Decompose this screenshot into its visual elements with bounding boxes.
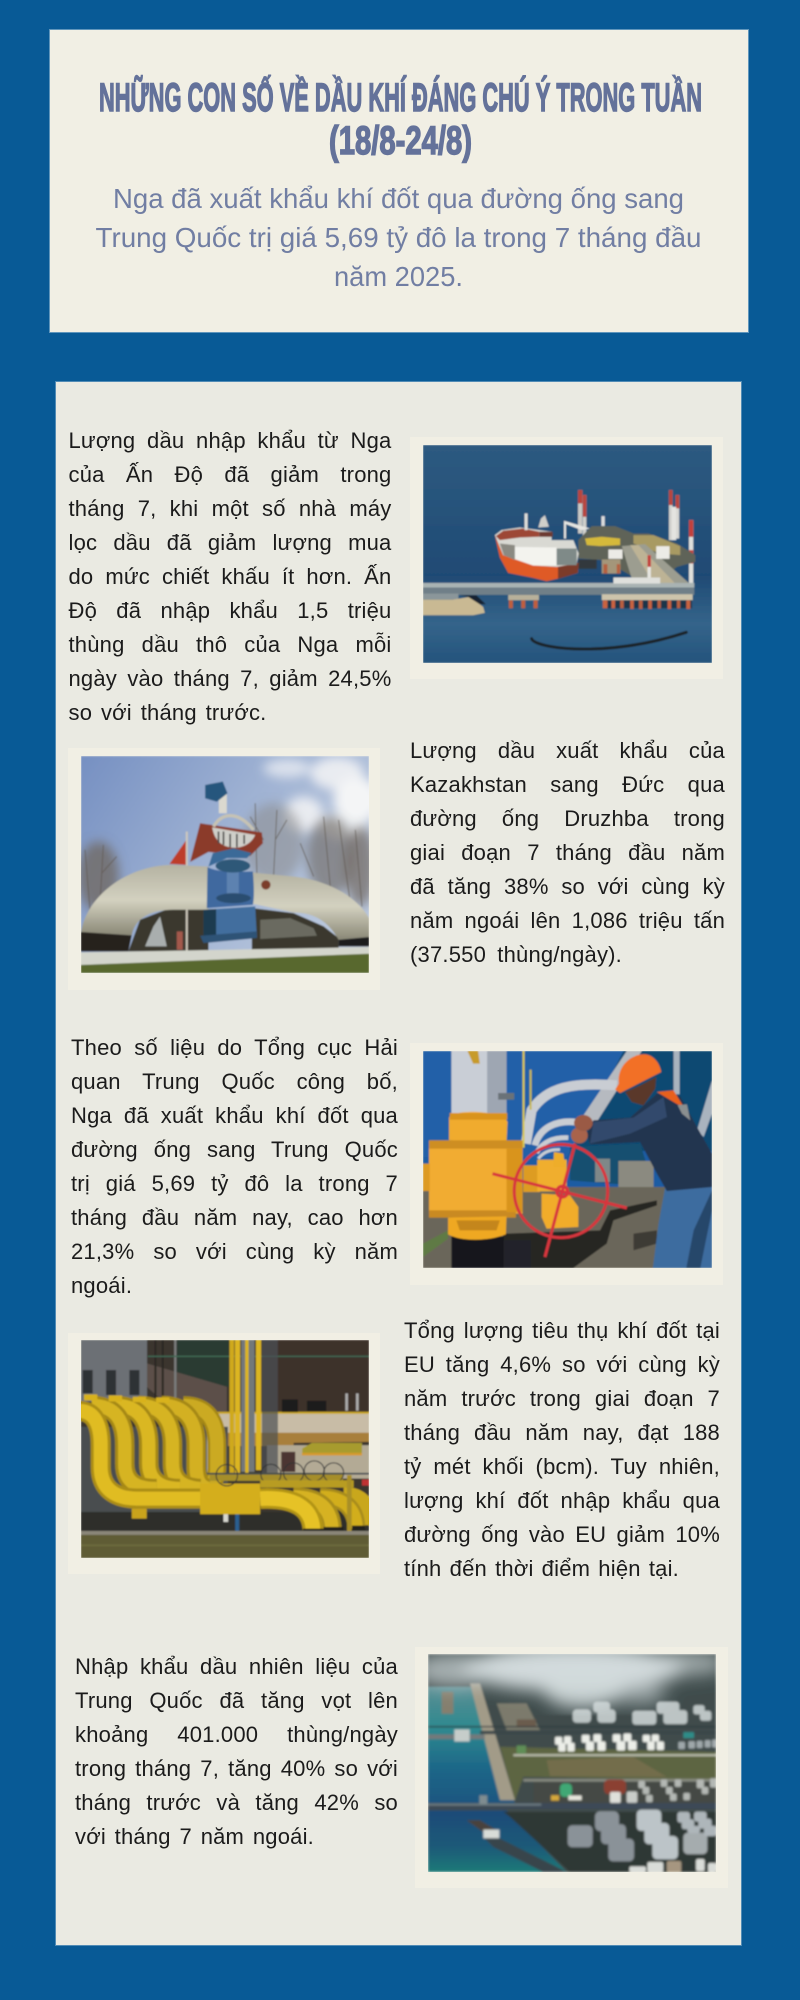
road — [470, 1683, 515, 1800]
smog — [413, 1645, 727, 1708]
field — [500, 1747, 716, 1800]
post and head — [219, 793, 227, 813]
rock breakwater — [423, 597, 485, 615]
tanker hull — [495, 535, 579, 581]
red wheel — [492, 1144, 627, 1257]
photo frame: worker turning valve wheel — [410, 1043, 723, 1285]
text block: EU gas consumption — [404, 1318, 720, 1581]
text block: gas exports to China — [71, 1035, 398, 1298]
water — [428, 1687, 515, 1804]
text block: China fuel oil imports: Trung Quốc đã tăng vọt lên — [75, 1688, 398, 1713]
gate valve — [523, 1165, 540, 1192]
text block: gas exports to China: tháng đầu năm nay, cao hơn — [71, 1205, 398, 1230]
text block: gas exports to China: Theo số liệu do Tổng cục Hải — [71, 1035, 398, 1060]
white column — [451, 1051, 507, 1118]
text block: EU gas consumption: đường ống vào EU giảm 10% — [404, 1522, 720, 1547]
text block: Kazakhstan exports: Kazakhstan sang Đức qua — [410, 772, 725, 797]
black base — [451, 1236, 504, 1268]
jetty — [428, 1734, 485, 1739]
text block: Kazakhstan exports: đường ống Druzhba trong — [410, 806, 725, 831]
text block: India imports: của Ấn Độ đã giảm trong — [68, 462, 392, 487]
text block: India imports: lọc dầu đã giảm lượng mua — [68, 530, 392, 555]
text block: China fuel oil imports: Nhập khẩu dầu nhiên liệu của — [75, 1654, 398, 1679]
text block: gas exports to China: Nga đã xuất khẩu khí đốt qua — [71, 1103, 398, 1128]
photo frame: aerial view of oil storage depot — [415, 1647, 728, 1888]
text block: Kazakhstan exports: năm ngoái lên 1,086 triệu tấn — [410, 908, 725, 933]
text block: EU gas consumption: lượng khí đốt nhập khẩu qua — [404, 1488, 720, 1513]
text block: China fuel oil imports: khoảng 401.000 thùng/ngày — [75, 1722, 398, 1747]
ground and grass — [81, 1531, 369, 1535]
photo frame: oil tanker at terminal — [410, 437, 723, 679]
text block: gas exports to China: trị giá 5,69 tỷ đô la trong 7 — [71, 1171, 398, 1196]
lower machinery — [81, 1427, 228, 1530]
white tank rows — [555, 1733, 664, 1751]
mid tank group — [523, 1779, 716, 1782]
text block: EU gas consumption: tháng đầu năm nay, đạt 188 — [404, 1420, 720, 1445]
text block: Kazakhstan exports: đã tăng 38% so với cùng kỳ — [410, 874, 725, 899]
subtitle — [96, 183, 702, 292]
text block: EU gas consumption: tính đến thời điểm hiện tại. — [404, 1556, 679, 1581]
docked tanker — [483, 1837, 567, 1872]
kerb and grass — [81, 947, 369, 965]
header panel — [50, 30, 748, 332]
title and subtitle text — [96, 74, 702, 292]
towers — [578, 490, 582, 533]
jetty deck — [578, 526, 695, 577]
horizontal pier road — [428, 1803, 716, 1809]
text block: gas exports to China: 21,3% so với cùng kỳ năm — [71, 1239, 398, 1264]
pipe arcs — [81, 865, 208, 935]
text block: EU gas consumption: năm trước trong giai đoạn 7 — [404, 1386, 720, 1411]
yellow S-bend pipes — [78, 1405, 217, 1499]
text block: China fuel oil imports: với tháng 7 năm ngoái. — [75, 1824, 314, 1849]
white pipes — [526, 1084, 617, 1159]
text block: India imports: Lượng dầu nhập khẩu từ Nga — [68, 428, 392, 453]
worker jacket — [587, 1094, 712, 1191]
face and hands — [625, 1077, 656, 1105]
subtitle: Trung Quốc trị giá 5,69 tỷ đô la trong 7 tháng đầu — [96, 222, 702, 253]
text block: EU gas consumption: tỷ mét khối (bcm). Tuy nhiên, — [404, 1454, 720, 1479]
text block: gas exports to China: quan Trung Quốc công bố, — [71, 1069, 398, 1094]
text block: EU gas consumption: EU tăng 4,6% so với cùng kỳ — [404, 1352, 720, 1377]
text block: EU gas consumption: Tổng lượng tiêu thụ khí đốt tại — [404, 1318, 720, 1343]
flag — [169, 839, 187, 865]
text block: India imports: ngày vào tháng 7, giảm 24,5% — [68, 666, 392, 691]
text block: Kazakhstan exports: giai đoạn 7 tháng đầu năm — [410, 840, 725, 865]
tree line under the arch — [128, 908, 339, 951]
text block: Kazakhstan exports: (37.550 thùng/ngày). — [410, 942, 622, 967]
text block: China fuel oil imports — [75, 1654, 398, 1849]
right building — [215, 1413, 369, 1433]
central plant — [497, 1703, 540, 1730]
subtitle: Nga đã xuất khẩu khí đốt qua đường ống sang — [113, 183, 684, 214]
subtitle: năm 2025. — [334, 261, 463, 292]
lower yard — [503, 1812, 716, 1872]
large tanks — [568, 1811, 634, 1861]
text block: India imports: do mức chiết khấu ít hơn. Ấn — [68, 564, 392, 589]
text block: India imports: so với tháng trước. — [68, 700, 266, 725]
content panel — [56, 382, 741, 1945]
photo frame: yellow gas pipes — [68, 1333, 380, 1574]
title: (18/8-24/8) — [329, 119, 472, 163]
yellow tank — [449, 1112, 508, 1142]
text block: gas exports to China: đường ống sang Trung Quốc — [71, 1137, 398, 1162]
upper tanks — [573, 1702, 711, 1725]
floating boom — [532, 632, 686, 649]
far structures — [570, 1144, 654, 1187]
right bends — [260, 1495, 369, 1530]
title — [99, 74, 702, 163]
bare trees — [78, 803, 375, 911]
ground — [423, 1187, 712, 1268]
vertical pipes — [241, 1340, 255, 1472]
text block: India imports — [68, 428, 392, 725]
tanker superstructure — [495, 527, 579, 567]
text block: Kazakhstan exports — [410, 738, 725, 967]
text block: Kazakhstan exports: Lượng dầu xuất khẩu của — [410, 738, 725, 763]
text block: gas exports to China: ngoái. — [71, 1273, 132, 1298]
text block: India imports: tháng 7, khi một số nhà máy — [68, 496, 392, 521]
pipe flanges on top — [84, 1394, 169, 1403]
pier — [423, 583, 694, 588]
worker jeans — [653, 1187, 712, 1268]
text block: India imports: Độ đã nhập khẩu 1,5 triệu — [68, 598, 392, 623]
photo frame: Druzhba pipeline monument — [68, 748, 380, 990]
hard hat — [615, 1054, 661, 1093]
red topper with sign — [190, 823, 263, 862]
text block: India imports: thùng dầu thô của Nga mỗi — [68, 632, 392, 657]
central valve — [200, 1484, 260, 1514]
blue valve — [207, 867, 254, 908]
text block: China fuel oil imports: trong tháng 7, tăng 40% so với — [75, 1756, 398, 1781]
text block: China fuel oil imports: tháng trước và tăng 42% so — [75, 1790, 398, 1815]
